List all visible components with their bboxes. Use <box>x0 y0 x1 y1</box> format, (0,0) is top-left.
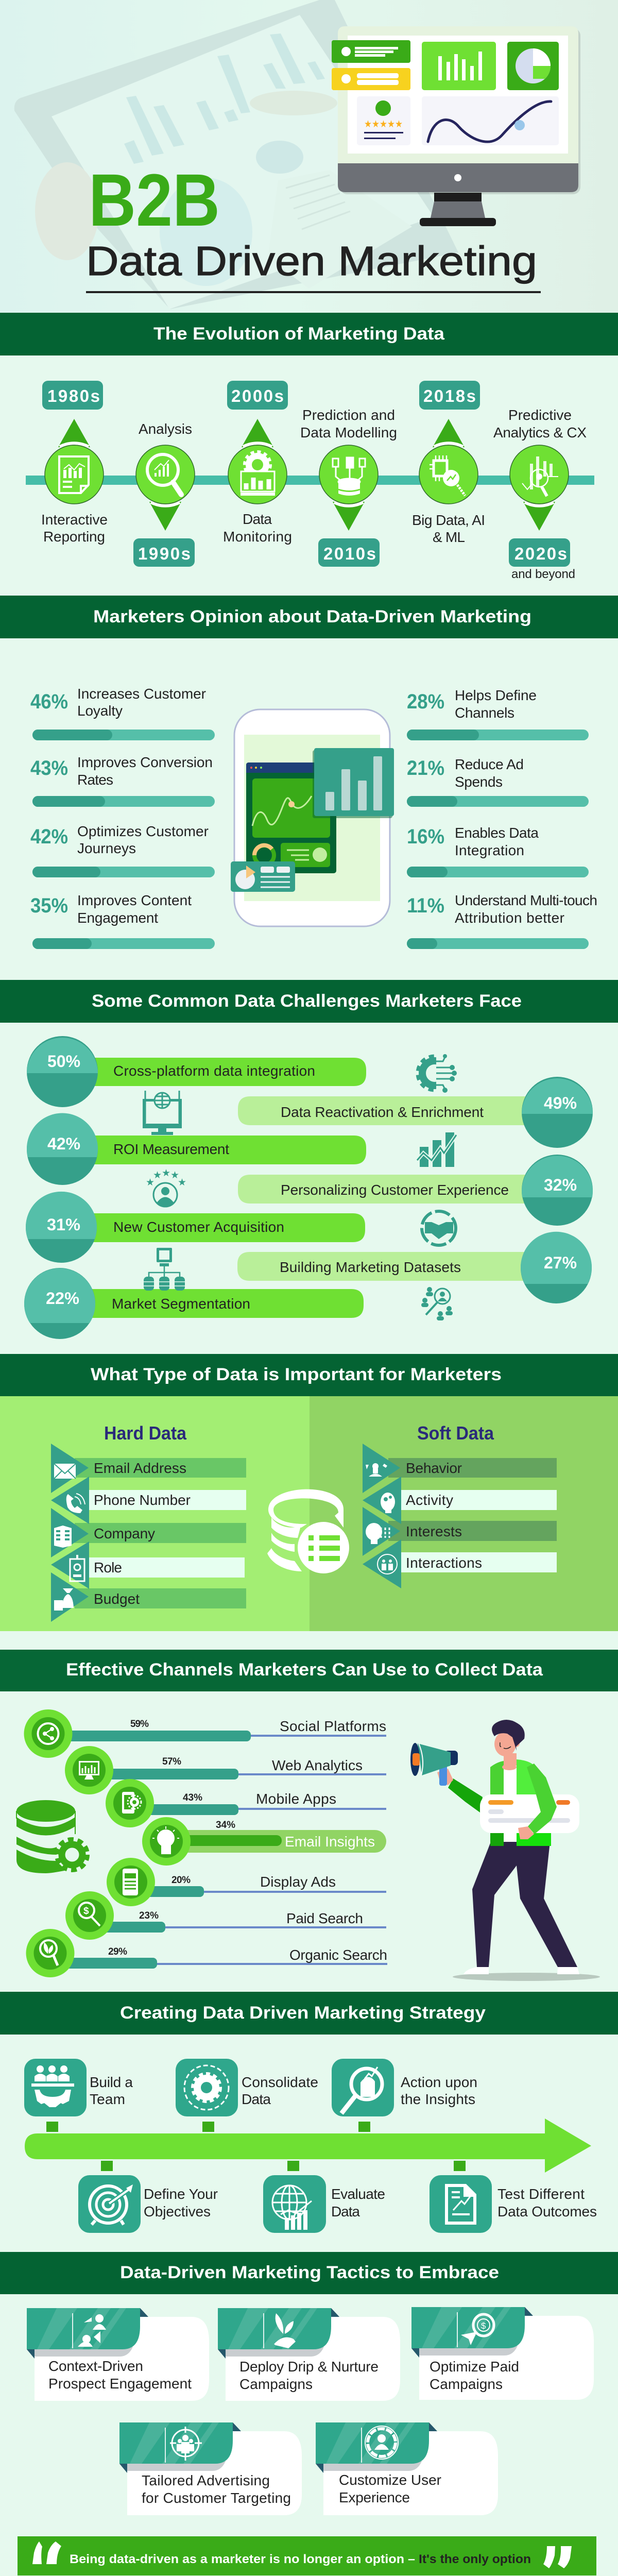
panel: hard data <box>0 1396 310 1631</box>
person with megaphone <box>410 1720 600 1981</box>
card: customize experience <box>316 2422 498 2515</box>
year labels: 2000s <box>231 386 284 405</box>
percentages: 11% <box>407 894 444 917</box>
card: customize experience: Customize User <box>339 2472 441 2488</box>
heading: Some Common Data Challenges Marketers Face <box>92 991 522 1011</box>
heading: Marketers Opinion about Data-Driven Marketing <box>93 607 531 626</box>
icon: person with stars: ★ <box>178 1177 186 1188</box>
timeline captions: Data <box>243 511 272 527</box>
icon: person with stars <box>146 1168 186 1207</box>
channel bars <box>62 1731 282 1969</box>
strategy labels: Action upon <box>401 2074 477 2090</box>
opinion labels: Enables Data <box>455 825 539 841</box>
section: strategy <box>0 1992 618 2233</box>
challenge labels: New Customer Acquisition <box>113 1219 284 1235</box>
year labels: 2020s <box>514 544 567 563</box>
icon: web analytics <box>79 1761 99 1780</box>
heading <box>0 1650 618 1691</box>
icon: paid search: $ <box>83 1906 89 1917</box>
opinion labels: Spends <box>455 774 503 790</box>
card: optimize paid: Optimize Paid <box>430 2359 519 2375</box>
opinion labels: Engagement <box>77 910 158 926</box>
icon: monitoring gear <box>237 452 278 496</box>
icon: gear circuit <box>418 1051 457 1095</box>
quote banner: Being data-driven as a marketer is no longer an option – <box>70 2552 415 2566</box>
section: types of data <box>0 1354 618 1631</box>
icon: magnifier <box>147 454 181 495</box>
panel: soft data: Activity <box>406 1492 453 1508</box>
connectors <box>46 2122 466 2171</box>
opinion labels: Integration <box>455 842 524 858</box>
icon: database network <box>144 1248 185 1291</box>
phone illustration <box>231 709 394 926</box>
year labels: 1990s <box>138 544 191 563</box>
year labels: 2010s <box>323 544 376 563</box>
heading <box>0 313 618 355</box>
channel percentages: 20% <box>171 1875 191 1886</box>
year labels: 2018s <box>423 386 476 405</box>
icon: report <box>59 456 89 493</box>
section: evolution of marketing data <box>0 313 618 581</box>
channel labels: Organic Search <box>289 1947 387 1963</box>
opinion labels <box>77 686 597 926</box>
heading: What Type of Data is Important for Marketers <box>91 1365 502 1384</box>
step tiles <box>24 2059 492 2233</box>
section: channels <box>0 1650 618 1981</box>
timeline captions: Predictive <box>508 407 572 423</box>
panel: hard data: Budget <box>94 1591 140 1607</box>
panel: soft data: Interactions <box>406 1555 482 1571</box>
channel labels: Paid Search <box>286 1910 363 1926</box>
heading: Creating Data Driven Marketing Strategy <box>120 2003 486 2023</box>
arrow <box>25 2119 591 2173</box>
icon: predictive analytics <box>522 456 558 496</box>
card: tailored advertising: for Customer Targeting <box>142 2490 291 2506</box>
quote banner <box>18 2536 596 2575</box>
percentages: 42% <box>30 825 68 848</box>
icon: person with stars: ★ <box>146 1177 154 1188</box>
panel: hard data: Phone Number <box>94 1492 191 1508</box>
panel: soft data: Soft Data <box>417 1422 494 1444</box>
icon: database list <box>267 1489 349 1573</box>
section: tactics <box>0 2252 618 2515</box>
timeline captions: Reporting <box>43 529 105 545</box>
icon: lightbulb <box>152 1826 179 1854</box>
icon: target <box>90 2184 133 2225</box>
strategy labels: Data <box>331 2204 360 2219</box>
card: customize experience: Experience <box>339 2489 410 2505</box>
year labels: 1980s <box>47 386 100 405</box>
icon: closing quote <box>543 2546 572 2568</box>
opinion labels: Journeys <box>77 840 136 856</box>
hero banner <box>0 0 618 313</box>
icon: person with stars: ★ <box>153 1170 162 1181</box>
timeline captions: Prediction and <box>302 407 395 423</box>
icon: opening quote <box>32 2541 61 2564</box>
icon: team <box>31 2065 74 2107</box>
panel: hard data: Hard Data <box>104 1422 187 1444</box>
strategy labels: the Insights <box>401 2091 475 2107</box>
challenge labels <box>112 1063 509 1312</box>
strategy labels: Data <box>242 2091 271 2107</box>
card: drip and nurture: Deploy Drip & Nurture <box>239 2359 379 2375</box>
card: context-driven: Prospect Engagement <box>48 2376 192 2392</box>
heading <box>0 1992 618 2035</box>
quote banner: It's the only option <box>419 2552 531 2566</box>
opinion labels: Understand Multi-touch <box>455 892 597 908</box>
challenge labels: Building Marketing Datasets <box>280 1259 461 1275</box>
panel: soft data <box>310 1396 618 1631</box>
card: context-driven: Context-Driven <box>48 2358 143 2374</box>
opinion labels: Improves Conversion <box>77 754 213 770</box>
opinion labels: Channels <box>455 705 514 721</box>
channel percentages: 23% <box>139 1910 159 1921</box>
timeline captions: Monitoring <box>223 529 292 545</box>
panel: hard data: Role <box>94 1560 122 1575</box>
channel percentages: 57% <box>162 1756 181 1767</box>
icon: share <box>38 1723 59 1744</box>
channel labels: Social Platforms <box>280 1718 386 1734</box>
card: tailored advertising <box>119 2422 302 2515</box>
strategy labels: Define Your <box>144 2186 218 2202</box>
icon: big data chip <box>430 455 465 496</box>
year labels <box>42 381 570 567</box>
channel percentages <box>108 1719 235 1957</box>
icon: paid search <box>79 1903 100 1926</box>
icon: rising chart <box>417 1132 456 1167</box>
card: context-driven <box>27 2308 209 2401</box>
percentages: 16% <box>407 825 444 848</box>
heading <box>0 980 618 1023</box>
challenge percent circles: 42% <box>47 1134 80 1153</box>
challenge percent circles: 31% <box>47 1215 80 1234</box>
challenge percent circles: 50% <box>47 1052 80 1071</box>
monitor illustration <box>332 26 580 226</box>
email insights highlight <box>175 1830 386 1853</box>
icon: person with stars: ★ <box>162 1168 170 1179</box>
channel percentages: 29% <box>108 1946 127 1957</box>
opinion labels: Improves Content <box>77 892 192 908</box>
timeline captions: Analysis <box>139 421 192 437</box>
icon: organic search <box>40 1940 58 1965</box>
channel percentages: 43% <box>183 1792 202 1803</box>
strategy labels: Objectives <box>144 2204 211 2219</box>
icons: hard data <box>54 1464 85 1611</box>
timeline captions: Analytics & CX <box>493 425 587 440</box>
card: tailored advertising: Tailored Advertising <box>142 2472 270 2488</box>
strategy labels: Build a <box>90 2074 133 2090</box>
card: optimize paid <box>411 2307 594 2400</box>
strategy labels: Test Different <box>497 2186 585 2202</box>
icon: magnifier people <box>421 1287 453 1320</box>
percentages: 43% <box>30 757 68 779</box>
strategy labels: Team <box>90 2091 125 2107</box>
blue channel lines <box>154 1735 387 1965</box>
heading <box>0 2252 618 2294</box>
progress bars <box>32 730 589 949</box>
challenge percent circles: 49% <box>544 1094 577 1112</box>
panel: soft data: Behavior <box>406 1460 462 1476</box>
percentages: 28% <box>407 690 444 713</box>
timeline captions: Big Data, AI <box>412 512 485 528</box>
timeline captions: & ML <box>433 529 465 545</box>
icon: monitor globe <box>143 1091 182 1135</box>
challenge bars <box>77 1058 541 1318</box>
heading <box>0 1354 618 1396</box>
heading: Effective Channels Marketers Can Use to Collect Data <box>66 1660 543 1680</box>
panel: soft data: Interests <box>406 1523 462 1539</box>
challenge percent circles <box>24 1036 593 1339</box>
icon: action insights <box>341 2067 382 2113</box>
timeline bar <box>26 476 594 485</box>
icon: test document <box>445 2184 476 2225</box>
icons: soft data <box>366 1463 397 1574</box>
title: B2B: B2B <box>89 159 220 242</box>
opinion labels: Attribution better <box>455 910 564 926</box>
challenge percent circles: 27% <box>544 1253 577 1272</box>
icon: globe chart <box>272 2185 312 2230</box>
icon: display ads <box>123 1869 138 1895</box>
channel labels: Email Insights <box>285 1834 375 1850</box>
strategy labels: Consolidate <box>242 2074 318 2090</box>
percentages: 35% <box>30 894 68 917</box>
challenge labels: Cross-platform data integration <box>113 1063 315 1079</box>
title: Data Driven Marketing: Data Driven Marketing <box>86 238 537 284</box>
channel percentages: 34% <box>216 1820 235 1831</box>
strategy labels: Data Outcomes <box>497 2204 597 2219</box>
timeline captions: and beyond <box>511 567 575 581</box>
percentages: 21% <box>407 757 444 779</box>
monitor illustration: ★★★★★ <box>364 119 403 130</box>
percentages <box>30 690 444 917</box>
card: drip and nurture <box>218 2308 400 2401</box>
opinion labels: Reduce Ad <box>455 756 524 772</box>
opinion labels: Increases Customer <box>77 686 206 702</box>
heading <box>0 596 618 638</box>
panel: hard data: Email Address <box>94 1460 186 1476</box>
channel labels <box>256 1718 387 1963</box>
opinion labels: Optimizes Customer <box>77 823 209 839</box>
panel: hard data: Company <box>94 1526 155 1541</box>
strategy labels <box>90 2074 597 2219</box>
channel nodes <box>24 1709 191 1977</box>
strategy labels: Evaluate <box>331 2186 385 2202</box>
timeline pointers <box>58 419 555 531</box>
section: data challenges <box>0 980 618 1339</box>
icon: database gear <box>16 1800 88 1873</box>
channel labels: Mobile Apps <box>256 1791 336 1807</box>
section: marketers opinion <box>0 596 618 949</box>
timeline nodes <box>45 445 569 504</box>
heading: Data-Driven Marketing Tactics to Embrace <box>120 2263 499 2282</box>
card: optimize paid: Campaigns <box>430 2376 503 2392</box>
icon: data modelling <box>333 457 365 496</box>
challenge labels: Personalizing Customer Experience <box>281 1182 509 1198</box>
channel labels: Web Analytics <box>272 1757 363 1773</box>
challenge labels: Data Reactivation & Enrichment <box>281 1104 484 1120</box>
opinion labels: Loyalty <box>77 703 123 719</box>
icon: mobile gear <box>122 1792 141 1814</box>
card: optimize paid: $ <box>481 2321 486 2331</box>
icon: consolidate gear <box>184 2065 229 2110</box>
challenge labels: ROI Measurement <box>113 1141 229 1157</box>
timeline captions <box>41 407 587 581</box>
timeline captions: Interactive <box>41 512 108 528</box>
challenge labels: Market Segmentation <box>112 1296 250 1312</box>
heading: The Evolution of Marketing Data <box>153 324 445 344</box>
opinion labels: Helps Define <box>455 687 537 703</box>
timeline captions: Data Modelling <box>300 425 397 440</box>
icon: person with stars: ★ <box>170 1170 179 1181</box>
challenge percent circles: 32% <box>544 1176 577 1194</box>
channel percentages: 59% <box>130 1719 149 1730</box>
card: drip and nurture: Campaigns <box>239 2376 313 2392</box>
opinion labels: Rates <box>77 772 113 788</box>
channel labels: Display Ads <box>260 1874 336 1890</box>
challenge percent circles: 22% <box>46 1289 79 1308</box>
icon: handshake <box>422 1211 456 1245</box>
percentages: 46% <box>30 690 68 713</box>
